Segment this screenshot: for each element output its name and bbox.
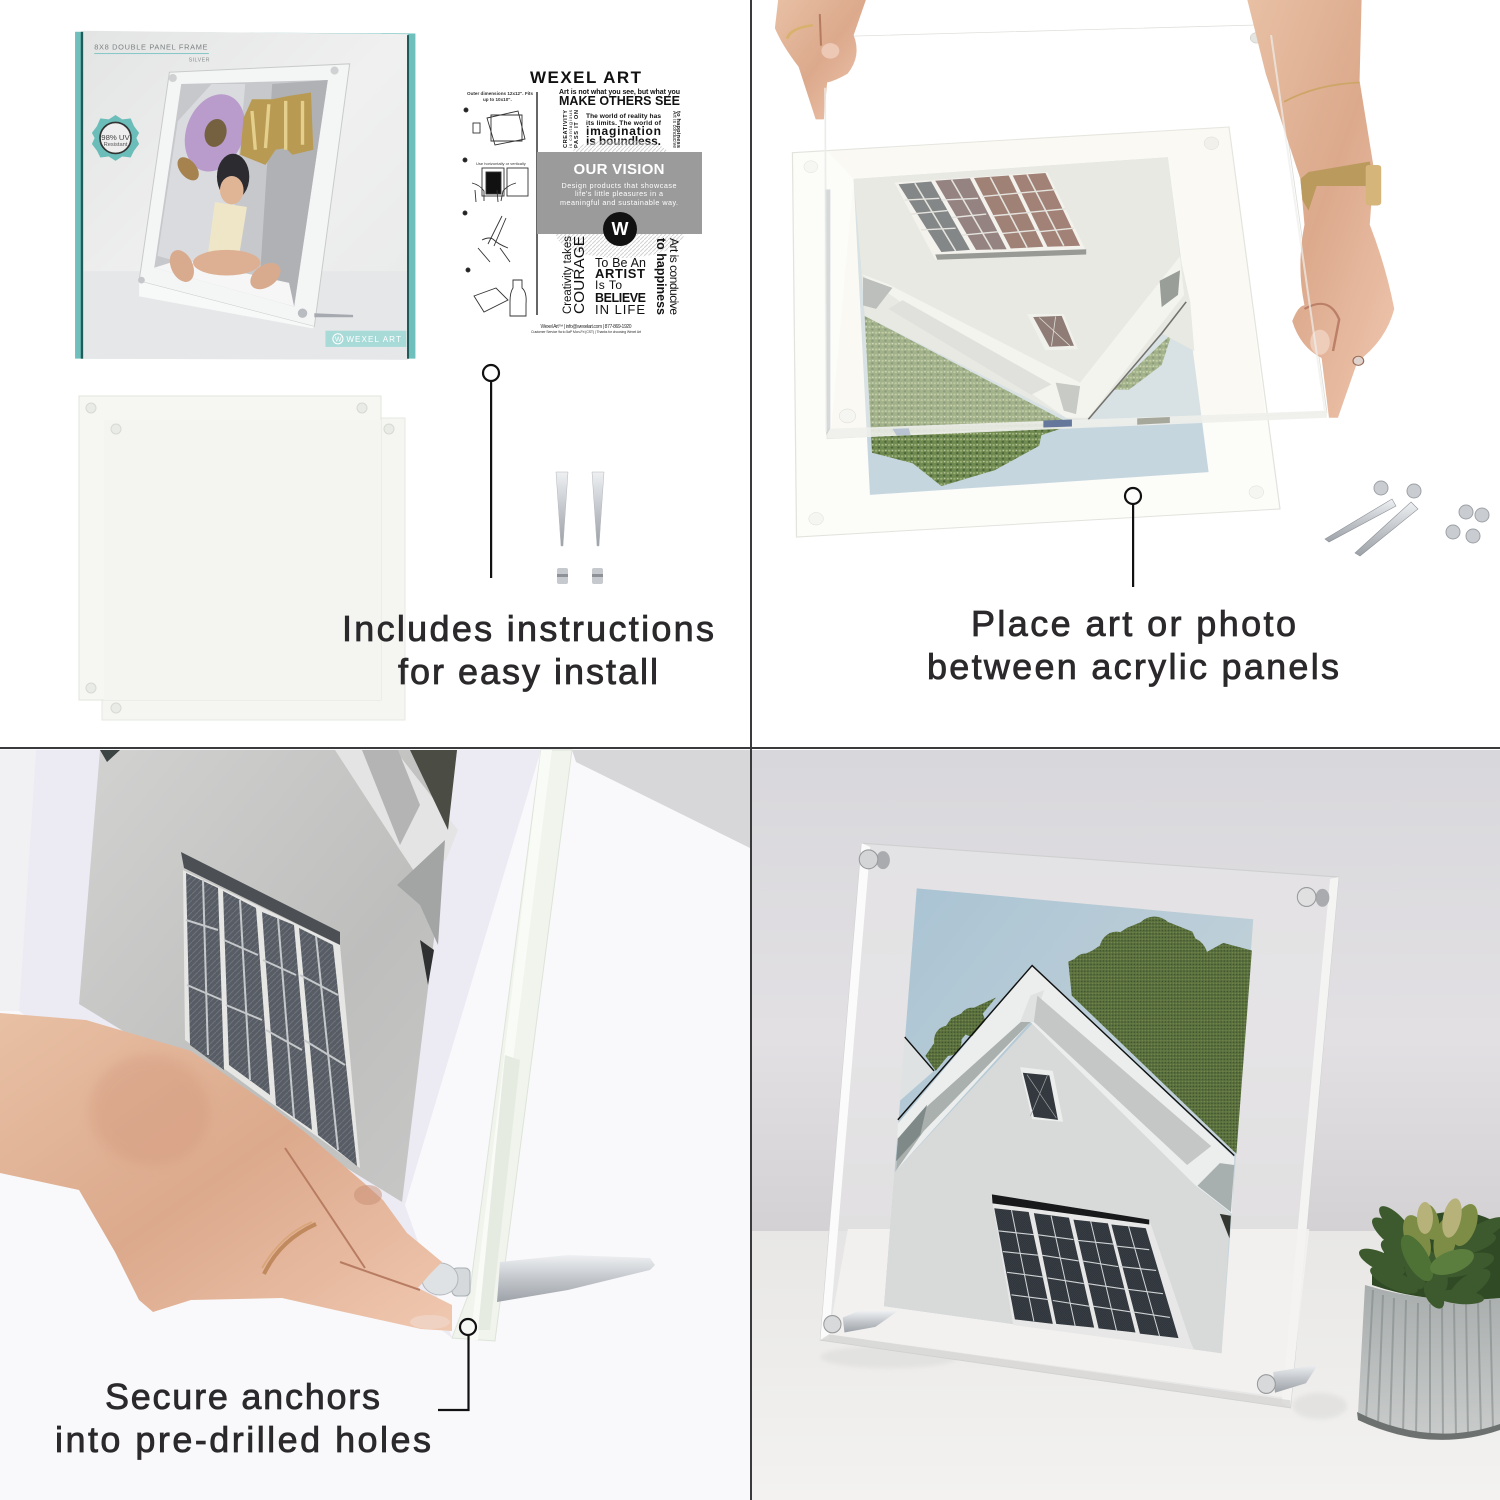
instruction sheet: IN LIFE — [595, 302, 645, 317]
caption: between acrylic panels — [927, 646, 1339, 687]
caption: for easy install — [398, 651, 658, 692]
instruction sheet: Customer Service 9a to 5aP Mon-Fri (CST) | Thanks for choosing Wexel Art — [531, 330, 641, 334]
sheet icons: Outer dimensions 12x12". Fits — [467, 91, 533, 96]
house photo — [884, 888, 1253, 1353]
loose standoff anchors — [1325, 481, 1489, 556]
instruction sheet: is boundless. — [586, 134, 661, 148]
hand — [0, 1013, 452, 1331]
front panel edge over hands — [825, 35, 1325, 432]
anchor pen — [422, 1255, 655, 1302]
instruction sheet: Creativity takes — [562, 236, 574, 314]
standoff anchors — [556, 472, 604, 584]
acrylic panels — [79, 396, 405, 720]
our vision band: Design products that showcase — [562, 181, 676, 190]
instruction sheet: The world of reality has — [586, 113, 661, 120]
callout pointer — [438, 1319, 476, 1410]
instruction sheet: COURAGE — [571, 236, 588, 314]
instruction sheet: WEXEL ART — [530, 68, 642, 87]
frame with photo — [19, 750, 572, 1341]
caption: Place art or photo — [971, 603, 1296, 644]
instruction sheet: to happiness — [675, 111, 681, 148]
our vision band: life's little pleasures in a — [575, 189, 663, 198]
sheet icons — [463, 91, 533, 316]
framed baby photo — [138, 64, 353, 328]
instruction sheet: To Be An — [595, 256, 646, 270]
instruction sheet: PASS IT ON — [574, 110, 580, 148]
background wall and table — [0, 749, 750, 1500]
caption: Secure anchors — [105, 1376, 380, 1417]
sheet icons: up to 10x10". — [483, 97, 512, 102]
UV resistant badge — [92, 115, 139, 161]
our vision band — [537, 140, 702, 258]
sheet icons: Use horizontally or vertically — [476, 161, 526, 166]
box title: 8X8 DOUBLE PANEL FRAME — [94, 43, 208, 52]
caption — [927, 603, 1339, 687]
wall and table — [752, 750, 1500, 1500]
box title: SILVER — [189, 57, 210, 63]
arm and hand: right — [1247, 0, 1394, 418]
panel: place art — [775, 0, 1489, 687]
instruction sheet: Wexel Art™ | info@wexelart.com | 877-869-1920 — [540, 324, 632, 330]
panel: finished frame — [752, 750, 1500, 1500]
corner standoffs — [824, 850, 1329, 1393]
Wexel Art logo tag — [325, 331, 406, 347]
instruction sheet: ARTIST — [595, 266, 645, 281]
hand: left — [775, 0, 866, 119]
instruction sheet: Art is conducive — [667, 238, 681, 315]
instruction sheet: its limits. The world of — [586, 120, 662, 127]
upside-down house photo — [854, 157, 1209, 495]
instruction sheet: Art is conducive — [671, 111, 677, 148]
front acrylic panel — [804, 25, 1327, 525]
instruction sheet: Is To — [595, 278, 622, 292]
panel: secure anchors — [0, 749, 750, 1500]
callout pointer — [1125, 488, 1141, 587]
UV resistant badge: Resistant — [104, 142, 128, 148]
instruction sheet — [463, 68, 702, 334]
caption — [342, 608, 714, 692]
caption — [55, 1376, 431, 1460]
caption: Includes instructions — [342, 608, 714, 649]
callout pointer — [483, 365, 499, 578]
instruction sheet: Art is not what you see, but what you — [559, 89, 680, 96]
UV resistant badge: 98% UV — [101, 133, 131, 142]
instruction sheet: imagination — [586, 124, 661, 138]
box title — [94, 43, 210, 63]
instruction sheet: CREATIVITY — [563, 110, 569, 148]
instruction sheet: is contagious — [568, 109, 574, 148]
our vision band: meaningful and sustainable way. — [560, 198, 678, 207]
acrylic frame — [820, 843, 1347, 1419]
back acrylic panel — [792, 127, 1280, 537]
Wexel Art logo tag: W — [335, 336, 342, 343]
our vision band: OUR VISION — [574, 161, 664, 178]
photo assembly — [775, 0, 1394, 537]
our vision band: W — [612, 219, 628, 239]
product box — [75, 31, 415, 360]
caption: into pre-drilled holes — [55, 1419, 431, 1460]
instruction sheet: to happiness — [654, 238, 668, 315]
Wexel Art logo tag: WEXEL ART — [346, 335, 401, 344]
instruction sheet: MAKE OTHERS SEE — [559, 94, 680, 108]
succulent in metal pot — [1356, 1197, 1500, 1440]
instruction sheet: BELIEVE — [595, 291, 646, 305]
panel: package contents — [75, 31, 714, 720]
